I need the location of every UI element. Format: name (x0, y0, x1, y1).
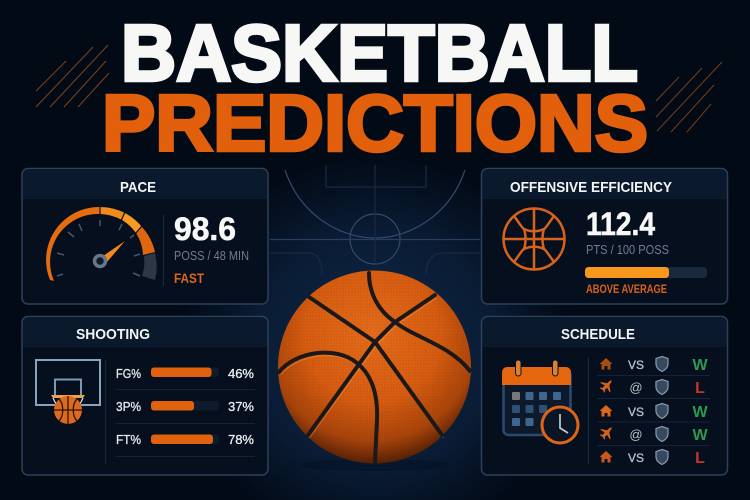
progress bar (585, 267, 707, 278)
panel: shooting (22, 316, 268, 475)
row: home win 2 (600, 404, 708, 421)
decorative stripes left (36, 45, 109, 107)
title line: predictions: PREDICTIONS (102, 78, 648, 168)
title line: basketball: BASKETBALL (121, 8, 638, 98)
row: away loss: @ (629, 380, 643, 395)
row: home win (600, 356, 708, 374)
gauge needle (103, 241, 125, 262)
label: above average: ABOVE AVERAGE (586, 282, 667, 296)
panel: pace (22, 168, 268, 304)
row: home win 2: W (692, 404, 708, 421)
panel: offensive efficiency (482, 168, 728, 304)
decorative stripes right (656, 62, 722, 132)
row: away win: W (692, 427, 708, 444)
row: home loss: L (695, 450, 705, 467)
title (102, 8, 648, 168)
heading: pace: PACE (120, 179, 156, 196)
unit: pts per 100 poss: PTS / 100 POSS (586, 242, 669, 257)
row: FT%: FT% (116, 432, 141, 447)
row: FG%: FG% (116, 366, 141, 381)
icon: calendar with clock (502, 360, 578, 443)
row: 3P% (116, 399, 254, 414)
row: 3P%: 3P% (116, 399, 141, 414)
row: FG%: 46% (228, 366, 254, 381)
basketball (278, 270, 472, 471)
row: FT% (116, 432, 254, 447)
row: home loss (600, 450, 705, 467)
heading: shooting: SHOOTING (76, 326, 150, 343)
row: away win: @ (629, 427, 643, 442)
heading: offensive efficiency: OFFENSIVE EFFICIENCY (510, 179, 672, 196)
row: home win 2: VS (628, 405, 644, 419)
icon: hoop with ball (36, 360, 100, 424)
label: fast: FAST (174, 270, 204, 286)
heading: schedule: SCHEDULE (561, 326, 635, 343)
unit: poss per 48 min: POSS / 48 MIN (174, 248, 249, 263)
row: home win: VS (628, 358, 644, 372)
row: FG% (116, 366, 254, 381)
row: home loss: VS (628, 451, 644, 465)
value: 98.6: 98.6 (174, 211, 236, 247)
panel: schedule (482, 316, 728, 475)
row: away loss: L (695, 380, 705, 397)
row: away loss (600, 380, 705, 397)
icon: basketball outline (504, 208, 564, 270)
row: 3P%: 37% (228, 399, 254, 414)
gauge hub (94, 256, 106, 266)
court lines background (270, 165, 480, 275)
row: FT%: 78% (228, 432, 254, 447)
value: 112.4: 112.4 (586, 206, 655, 242)
gauge (46, 206, 157, 281)
row: home win: W (692, 357, 708, 374)
row: away win (600, 426, 708, 444)
